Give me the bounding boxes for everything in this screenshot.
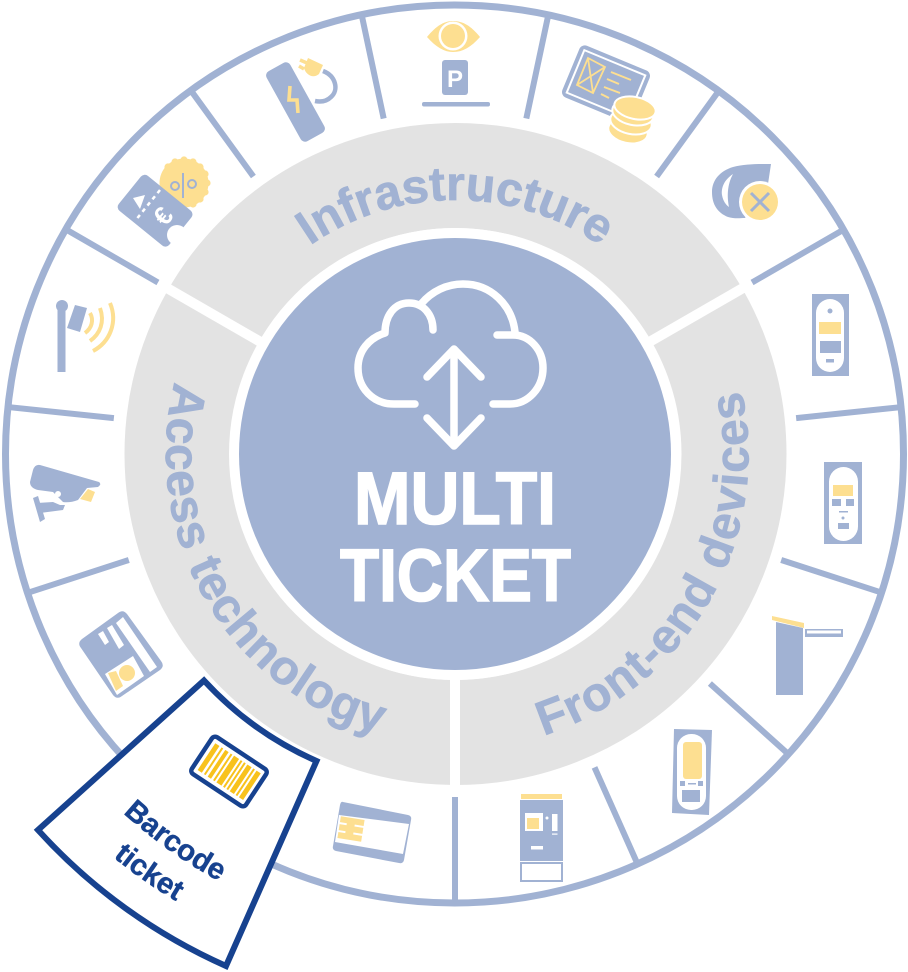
label: ticket: ticket: [116, 844, 184, 902]
title: MULTI: MULTI: [354, 457, 556, 540]
icon: antenna with signal: [56, 300, 113, 372]
icon: pay station: [520, 794, 563, 881]
icon: discount ticket: €: [147, 201, 179, 231]
icon: security camera: [30, 465, 100, 522]
icon: drop with cross: [712, 164, 781, 223]
label: Front-end devices: Front-end devices: [534, 393, 750, 736]
label: Access technology: Access technology: [165, 382, 388, 738]
label: Infrastructure: Infrastructure: [294, 168, 610, 244]
icon: chip card: [333, 802, 411, 863]
icon: front-end device 1: [812, 294, 849, 376]
icon: barcode: [190, 735, 268, 808]
icon: tablet with database: [560, 44, 658, 147]
icon: front-end device 2: [824, 462, 862, 544]
centre disc: [229, 228, 681, 680]
icon: cloud with up/down arrow: [358, 284, 543, 446]
highlighted segment: barcode ticket: [34, 676, 320, 970]
icon: parking sensor with eye: [422, 21, 490, 106]
icon: front-end device 3: [672, 729, 712, 815]
category ring: [160, 176, 750, 792]
icon: ID card: [79, 611, 163, 698]
icon: barrier gate: [772, 616, 843, 695]
title: TICKET: TICKET: [340, 534, 571, 617]
icon: discount ticket: [116, 156, 211, 249]
icon: parking sensor with eye: P: [447, 66, 463, 93]
label: Barcode: Barcode: [124, 798, 224, 879]
icon: charging station: [264, 58, 335, 144]
